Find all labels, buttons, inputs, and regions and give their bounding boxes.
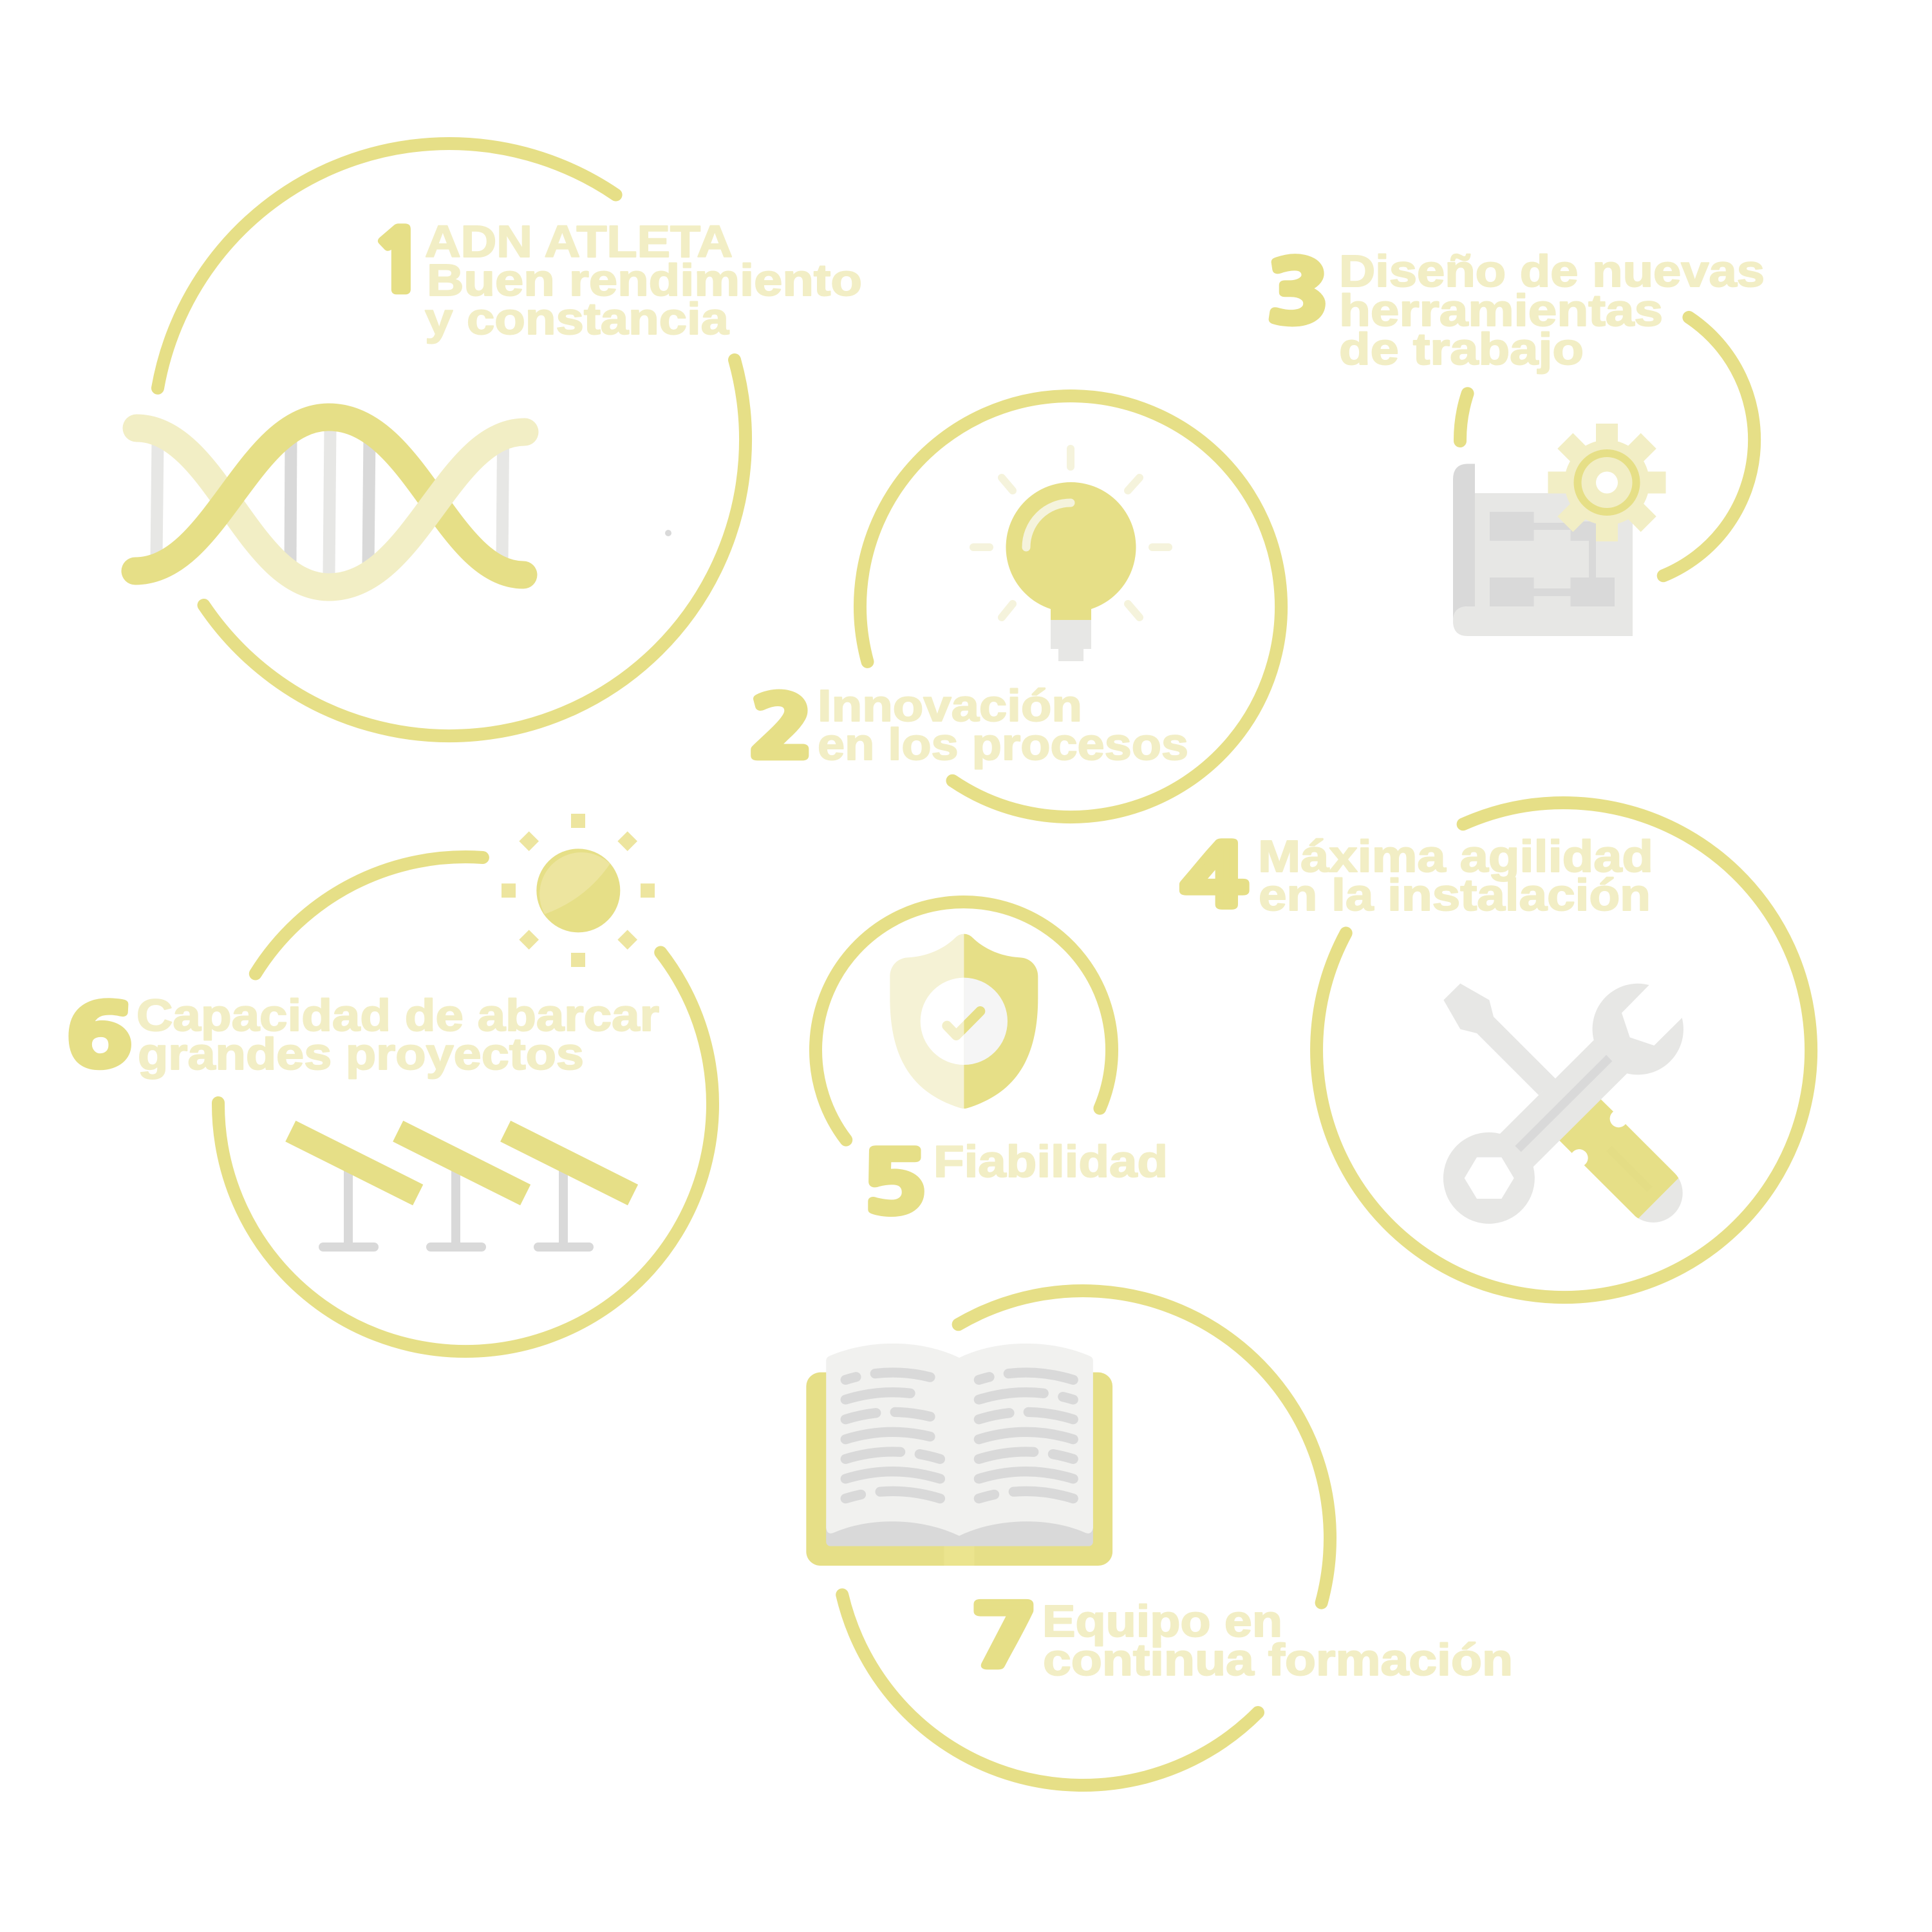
icon: open book [806, 1344, 1112, 1566]
text: diseño: Diseño de nuevas [1339, 246, 1765, 296]
ring 4 [1317, 803, 1811, 1297]
text: agilidad: en la instalación [1259, 870, 1651, 920]
text: proyectos [136, 990, 659, 1079]
text: agilidad: Máxima agilidad [1258, 831, 1653, 881]
number 1: 1 [372, 220, 426, 303]
text: diseño [1339, 246, 1765, 374]
text: proyectos: grandes proyectos [138, 1029, 584, 1079]
panel: 7 formación [806, 1291, 1513, 1785]
number 7: 7 [971, 1595, 1037, 1678]
text: ADN atleta [425, 216, 862, 344]
text: innovación: en los procesos [818, 719, 1188, 769]
ring 1 [158, 144, 746, 736]
panel: 1 ADN atleta [135, 144, 862, 736]
icon: solar panels [285, 1121, 638, 1252]
text: fiabilidad: Fiabilidad [933, 1136, 1168, 1186]
ring 6 [218, 857, 713, 1351]
panel: 6 grandes proyectos [66, 814, 713, 1351]
number 2: 2 [749, 686, 814, 769]
number 6: 6 [66, 995, 132, 1078]
ring 3 [1460, 317, 1754, 576]
text: ADN atleta: Buen rendimiento [427, 255, 862, 305]
number 3: 3 [1267, 251, 1329, 334]
text: diseño: de trabajo [1339, 324, 1584, 374]
text: diseño: herramientas [1339, 285, 1663, 335]
text: ADN atleta: y constancia [425, 294, 729, 344]
text: proyectos: Capacidad de abarcar [136, 990, 659, 1040]
panel: 2 innovación [749, 396, 1281, 817]
icon: blueprint and gear [1453, 424, 1666, 636]
number 4: 4 [1181, 835, 1248, 918]
number 5: 5 [862, 1142, 926, 1225]
icon: screwdriver and wrench [1443, 984, 1683, 1224]
text: innovación: Innovación [818, 680, 1082, 731]
panel: 4 agilidad [1181, 803, 1811, 1297]
panel: 3 diseño [1267, 246, 1765, 636]
icon: sun [502, 814, 655, 967]
text: formación: Equipo en [1042, 1596, 1282, 1646]
text: agilidad [1258, 831, 1653, 920]
text: formación: continua formación [1043, 1635, 1513, 1685]
icon: light bulb [973, 449, 1168, 661]
ring 7 [842, 1291, 1330, 1785]
text: innovación [818, 680, 1188, 769]
icon: DNA helix [135, 417, 671, 587]
text: formación [1042, 1596, 1513, 1685]
icon: shield [890, 934, 1038, 1109]
text: ADN atleta: ADN ATLETA [425, 216, 733, 267]
ring 2 [860, 396, 1281, 817]
ring 5 [816, 902, 1112, 1140]
panel: 5 fiabilidad [816, 902, 1168, 1225]
